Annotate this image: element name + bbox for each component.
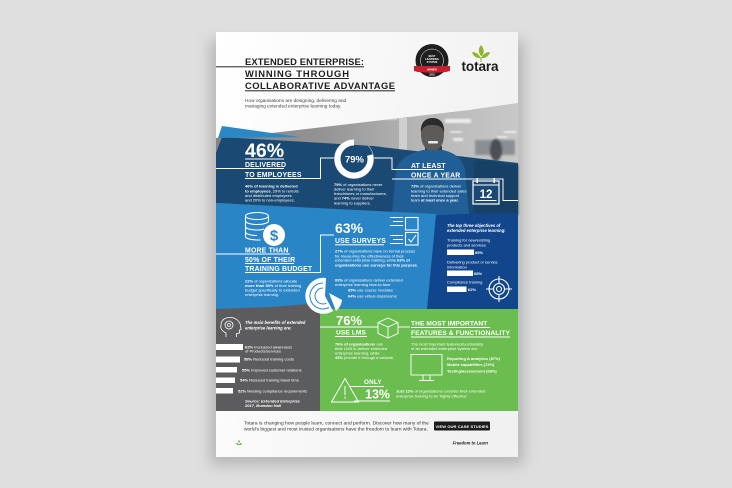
text: 79% detail: and 74% never deliver xyxy=(334,196,374,200)
heading: features: THE MOST IMPORTANT xyxy=(411,320,487,328)
bar chart: benefits: 54% Reduced training travel time xyxy=(240,378,300,382)
text: once a year detail: team at least once a year. xyxy=(411,198,459,202)
subtitle xyxy=(245,98,346,110)
objective 1: Training for new/existing xyxy=(447,238,490,242)
text: footer copy: Totara is changing how people learn, connect and perform. Discover how many of the xyxy=(244,420,429,426)
icon: target xyxy=(486,276,512,302)
text: surveys detail xyxy=(335,248,418,268)
navy objectives panel xyxy=(427,213,518,309)
text: LMS detail: their LMS to deliver extended xyxy=(335,346,387,351)
text: benefits heading: enterprise learning are: xyxy=(245,326,292,330)
text: delivery methods: 83% of organisations deliver extended xyxy=(335,278,403,282)
stat: at least once a year: ONCE A YEAR xyxy=(411,172,460,180)
objective 1: products and services xyxy=(447,242,486,248)
objective 2 xyxy=(447,260,498,276)
stat: 63% use surveys xyxy=(335,220,386,245)
award badge: BEST xyxy=(429,54,436,58)
stat: more than 50%: MORE THAN xyxy=(245,248,289,254)
icon: calendar: 12 xyxy=(480,189,492,201)
tagline: Freedom to Learn xyxy=(453,440,488,446)
text: surveys detail: extended enterprise training, while 63% of xyxy=(335,258,411,262)
text: once a year detail: 73% of organisations deliver xyxy=(411,184,462,188)
objective 3 xyxy=(447,280,482,292)
donut chart: 79% xyxy=(334,140,374,178)
text: budget detail: budget specifically to extended xyxy=(245,288,300,292)
text: 79% detail xyxy=(334,182,387,206)
panel: objectives xyxy=(447,223,506,292)
totara logo xyxy=(462,45,499,74)
bar chart: benefits: 62% Increased awareness xyxy=(245,344,292,350)
objective 2: 68% xyxy=(474,271,482,276)
bar chart: benefits: 58% Reduced training costs xyxy=(244,356,294,362)
icon: coins and dollar xyxy=(246,212,285,246)
award badge: SYSTEM xyxy=(427,60,437,64)
text: 46% detail: to employees, 29% to remote xyxy=(245,188,300,194)
blue panel xyxy=(216,203,518,312)
button: view our case studies: VIEW OUR CASE STUDIES xyxy=(436,424,489,429)
text: 13% detail: Just 13% of organisations consider their extended xyxy=(396,388,485,394)
totara logo: totara xyxy=(462,59,499,74)
stat: at least once a year xyxy=(374,158,518,200)
dark blue band xyxy=(216,137,518,216)
text: budget detail: more than 50% of their training xyxy=(245,283,301,288)
icon: box xyxy=(378,318,410,338)
text: features list xyxy=(447,356,501,374)
icon: white pie chart xyxy=(305,278,342,314)
award badge xyxy=(414,44,450,77)
text: 79% detail: deliver learning to their xyxy=(334,186,375,192)
subtitle: How organisations are designing, delivering and xyxy=(245,98,346,104)
objective 3: 62% xyxy=(468,287,476,292)
text: surveys detail: for measuring the effectiveness of their xyxy=(335,254,405,258)
text: LMS detail: enterprise learning, while xyxy=(335,350,380,356)
heading: features: FEATURES & FUNCTIONALITY xyxy=(411,330,510,337)
text: budget detail xyxy=(245,278,301,297)
title: COLLABORATIVE ADVANTAGE xyxy=(245,80,395,91)
text: benefits heading: The main benefits of extended xyxy=(245,320,306,325)
stat: 46% delivered: 46% xyxy=(245,140,284,162)
heading: features xyxy=(411,320,510,338)
title: WINNING THROUGH xyxy=(245,68,349,79)
icon: calendar xyxy=(473,178,499,204)
source note: Source: Extended Enterprise xyxy=(245,398,301,404)
panel: objectives: extended enterprise learning: xyxy=(447,228,506,233)
light blue corner wedge xyxy=(218,126,300,138)
objective 1: 69% xyxy=(475,250,483,255)
icon: coins and dollar: $ xyxy=(270,228,279,244)
subtitle: managing extended enterprise learning today. xyxy=(245,104,341,110)
text: delivery methods: 65% use course modules xyxy=(348,288,393,292)
text: 13% detail xyxy=(396,388,485,398)
text: features list: Reporting & analytics (87%) xyxy=(447,356,501,361)
green panel xyxy=(320,309,518,411)
text: features intro xyxy=(411,342,483,351)
text: once a year detail xyxy=(411,184,467,202)
stat: 63% use surveys: 63% xyxy=(335,220,364,236)
objective 1 xyxy=(447,238,490,255)
award badge: 2018 xyxy=(429,74,435,76)
text: benefits heading xyxy=(245,320,306,330)
text: LMS detail: 43% provide it through a website. xyxy=(335,355,394,360)
text: features intro: of an extended enterprise system are: xyxy=(411,346,478,351)
poster sheet xyxy=(216,32,518,457)
photo band xyxy=(216,103,518,205)
text: delivery methods: 64% use virtual classrooms xyxy=(348,294,397,298)
bar chart: benefits xyxy=(216,344,307,394)
text: 79% detail: 79% of organisations never xyxy=(334,182,383,187)
text: once a year detail: learning to their extended sales xyxy=(411,188,467,194)
text: budget detail: enterprise learning. xyxy=(245,292,279,297)
bar chart: benefits: of Products/services xyxy=(245,348,281,354)
stat: only 13%: ONLY xyxy=(364,379,382,386)
award badge: LEARNING xyxy=(425,57,439,61)
stat: only 13% xyxy=(354,379,390,402)
stat: 46% delivered: DELIVERED xyxy=(245,162,286,169)
stat: 46% delivered: TO EMPLOYEES xyxy=(245,172,302,179)
panel: objectives: The top three objectives of xyxy=(447,223,501,228)
stat: more than 50% xyxy=(216,235,334,273)
grey benefits panel xyxy=(216,303,322,411)
donut chart: 79%: 79% xyxy=(345,154,365,166)
text: surveys detail: 27% of organisations have no formal process xyxy=(335,248,415,254)
stat: 46% delivered xyxy=(216,140,337,179)
award badge: WINNER xyxy=(427,68,437,72)
objective 3: Compliance training xyxy=(447,280,482,284)
text: features list: Testing/assessment (68%) xyxy=(447,368,497,374)
icon: checklist xyxy=(390,218,418,245)
text: surveys detail: organisations use surveys for this purpose. xyxy=(335,262,418,268)
objective 2: Delivering product or service xyxy=(447,260,498,264)
stat: more than 50%: TRAINING BUDGET xyxy=(245,266,313,273)
text: 13% detail: enterprise training to be 'highly effective' xyxy=(396,394,467,398)
source note xyxy=(244,398,301,408)
stat: more than 50%: 50% OF THEIR xyxy=(245,257,295,264)
button: view our case studies xyxy=(434,422,490,430)
text: 79% detail: learning to suppliers. xyxy=(334,200,371,206)
text: footer copy xyxy=(244,420,429,432)
text: once a year detail: team and technical support xyxy=(411,193,460,198)
text: delivery methods xyxy=(335,278,403,298)
text: LMS detail: 76% of organisations use xyxy=(335,342,384,346)
stat: 63% use surveys: USE SURVEYS xyxy=(335,238,386,245)
text: features intro: The most important features/functionality xyxy=(411,342,483,346)
bar chart: benefits: 55% Improved customer relations xyxy=(242,368,302,372)
text: 46% detail: and 20% to non-employees. xyxy=(245,198,295,202)
stat: only 13%: 13% xyxy=(365,388,390,402)
text: LMS detail xyxy=(335,342,394,360)
text: budget detail: 22% of organisations allocate xyxy=(245,278,298,284)
stat: at least once a year: AT LEAST xyxy=(411,163,446,170)
objective 2: information xyxy=(447,264,467,270)
text: 46% detail: 46% of learning is delivered xyxy=(245,184,298,188)
source note: 2017, Brandon Hall xyxy=(244,403,282,408)
bar chart: benefits: 52% Meeting compliance requirements xyxy=(238,388,307,394)
icon: small leaf logo xyxy=(236,440,242,445)
text: 46% detail xyxy=(245,184,300,202)
title: EXTENDED ENTERPRISE: xyxy=(245,56,364,67)
stat: 76% use LMS: 76% xyxy=(336,313,362,328)
stat: 76% use LMS: USE LMS xyxy=(336,330,367,336)
title xyxy=(216,56,395,91)
icon: monitor xyxy=(411,354,442,380)
icon: head with gear xyxy=(221,318,241,337)
text: delivery methods: enterprise learning face-to-face. xyxy=(335,282,391,287)
text: footer copy: world's biggest and most trusted organisations have the freedom to learn with Totara. xyxy=(244,426,428,432)
text: 46% detail: and distributed employees xyxy=(245,193,292,198)
text: 79% detail: franchisees or manufacturers, xyxy=(334,191,387,196)
text: features list: Mobile capabilities (72%) xyxy=(447,362,495,367)
stat: 76% use LMS xyxy=(320,313,378,337)
icon: warning triangle xyxy=(332,378,384,402)
